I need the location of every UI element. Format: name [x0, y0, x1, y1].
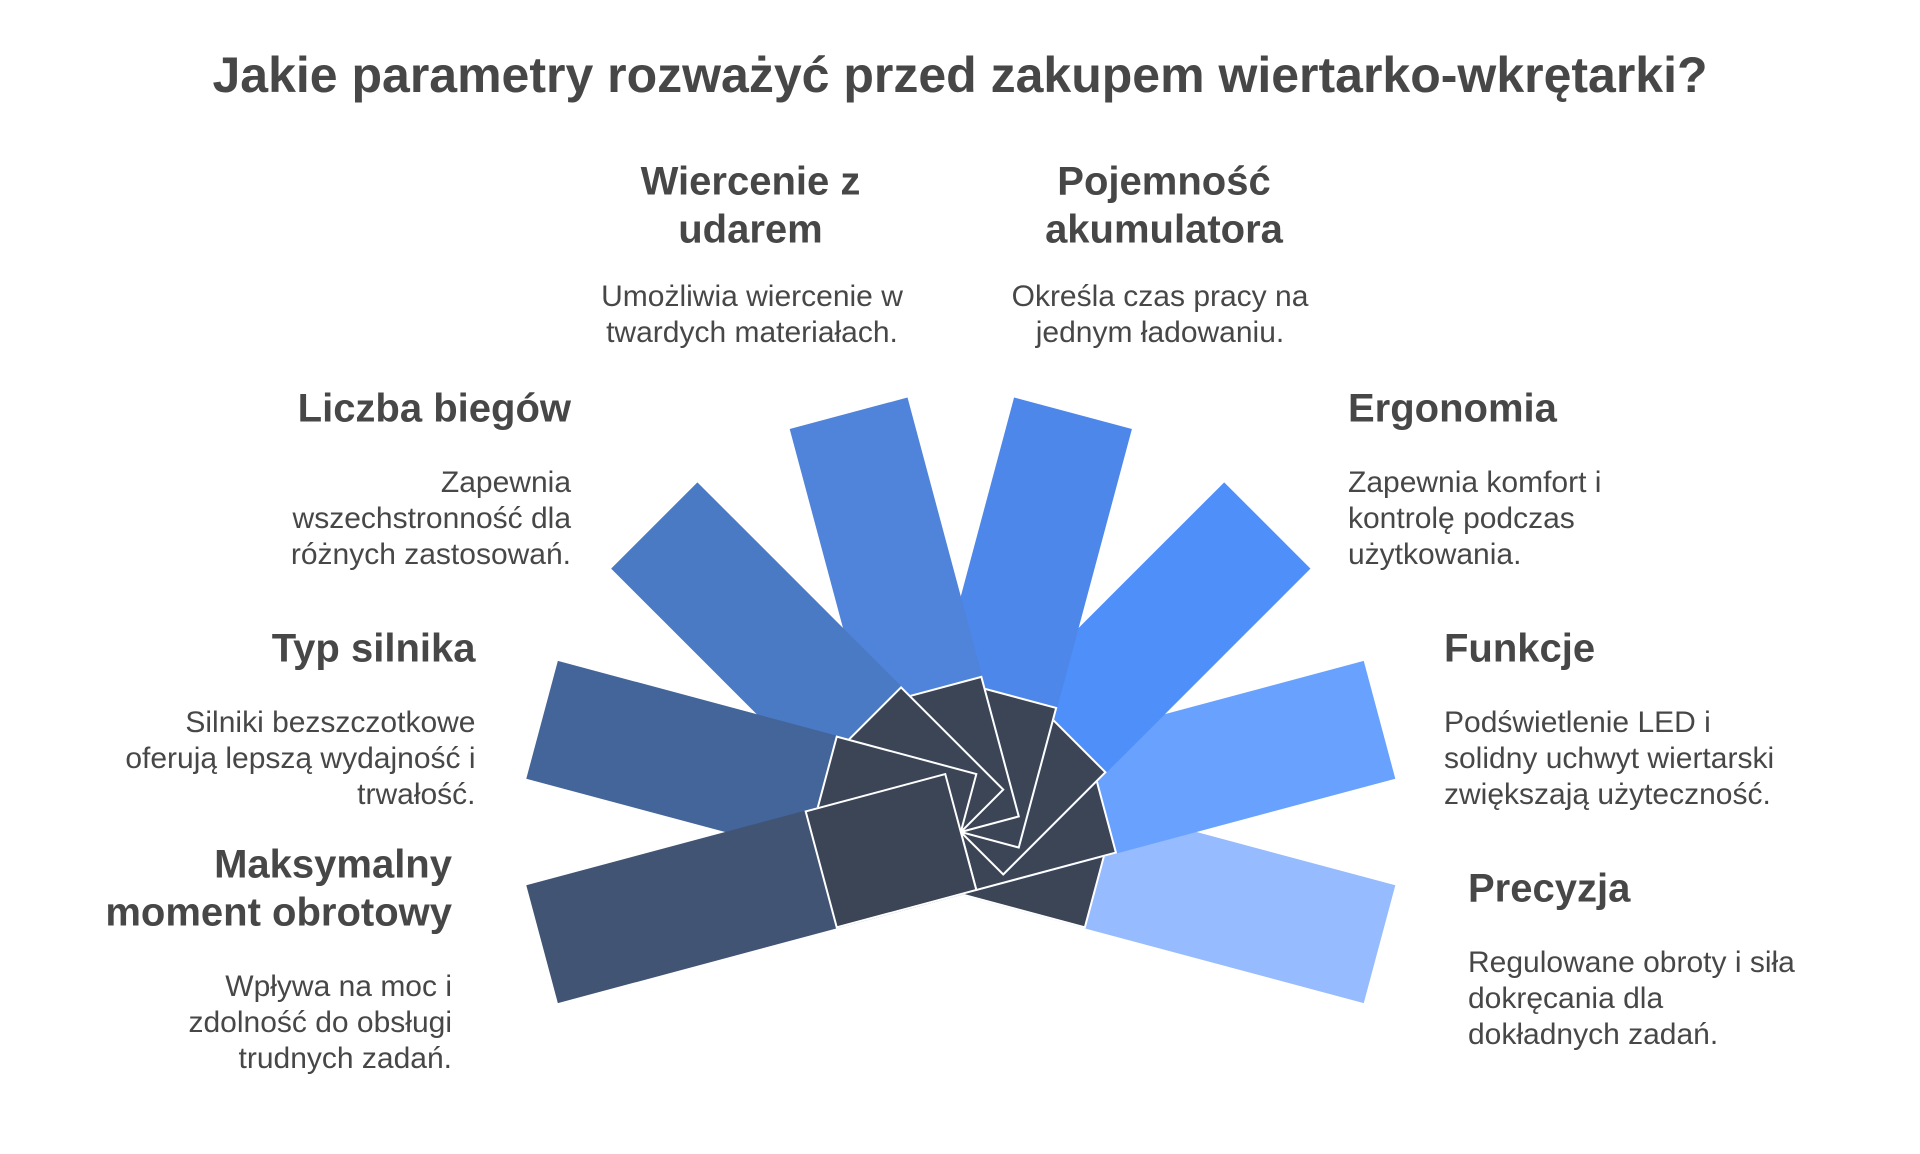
fan chart	[526, 397, 1395, 1003]
heading: Liczba biegów	[298, 386, 572, 430]
heading: Wiercenie z	[641, 160, 860, 204]
description: trudnych zadań.	[239, 1042, 452, 1075]
description: Wpływa na moc i	[225, 970, 452, 1003]
heading: akumulatora	[1045, 208, 1284, 252]
description: Podświetlenie LED i	[1444, 706, 1711, 739]
heading: Funkcje	[1444, 626, 1595, 670]
panel: Funkcje	[1444, 626, 1774, 811]
bar: Ergonomia	[918, 482, 1310, 875]
description: Umożliwia wiercenie w	[601, 280, 903, 313]
heading: Ergonomia	[1348, 386, 1558, 430]
description: dokładnych zadań.	[1468, 1018, 1718, 1051]
description: trwałość.	[357, 778, 476, 811]
bar: Liczba biegów	[611, 482, 1004, 875]
description: wszechstronność dla	[292, 502, 571, 535]
description: różnych zastosowań.	[291, 538, 571, 571]
heading: Pojemność	[1057, 160, 1271, 204]
panel: Maksymalny moment obrotowy	[105, 842, 453, 1075]
heading: moment obrotowy	[105, 890, 453, 934]
bar: Typ silnika	[526, 661, 977, 891]
description: Regulowane obroty i siła	[1468, 946, 1795, 979]
panel: Typ silnika	[125, 626, 476, 811]
bar: Pojemność akumulatora	[902, 397, 1132, 848]
description: oferują lepszą wydajność i	[125, 742, 476, 775]
heading: Maksymalny	[214, 842, 453, 886]
panel: Ergonomia	[1348, 386, 1601, 571]
description: Zapewnia komfort i	[1348, 466, 1601, 499]
description: twardych materiałach.	[606, 316, 898, 349]
panel: Wiercenie z udarem	[601, 160, 903, 349]
heading: Typ silnika	[272, 626, 476, 670]
description: jednym ładowaniu.	[1035, 316, 1284, 349]
description: użytkowania.	[1348, 538, 1521, 571]
description: Określa czas pracy na	[1012, 280, 1309, 313]
bar: Precyzja	[945, 773, 1395, 1003]
panel: Pojemność akumulatora	[1012, 160, 1309, 349]
description: zwiększają użyteczność.	[1444, 778, 1771, 811]
description: kontrolę podczas	[1348, 502, 1575, 535]
description: Zapewnia	[441, 466, 571, 499]
bar: Maksymalny moment obrotowy	[526, 773, 977, 1003]
description: zdolność do obsługi	[188, 1006, 452, 1039]
heading: udarem	[678, 208, 823, 252]
description: solidny uchwyt wiertarski	[1444, 742, 1774, 775]
bar: Wiercenie z udarem	[790, 397, 1020, 848]
description: Silniki bezszczotkowe	[185, 706, 476, 739]
panel: Precyzja	[1468, 866, 1795, 1051]
title: Jakie parametry rozważyć przed zakupem wiertarko-wkrętarki?	[212, 47, 1708, 103]
description: dokręcania dla	[1468, 982, 1663, 1015]
bar: Funkcje	[945, 661, 1395, 891]
heading: Precyzja	[1468, 866, 1631, 910]
panel: Liczba biegów	[291, 386, 572, 571]
